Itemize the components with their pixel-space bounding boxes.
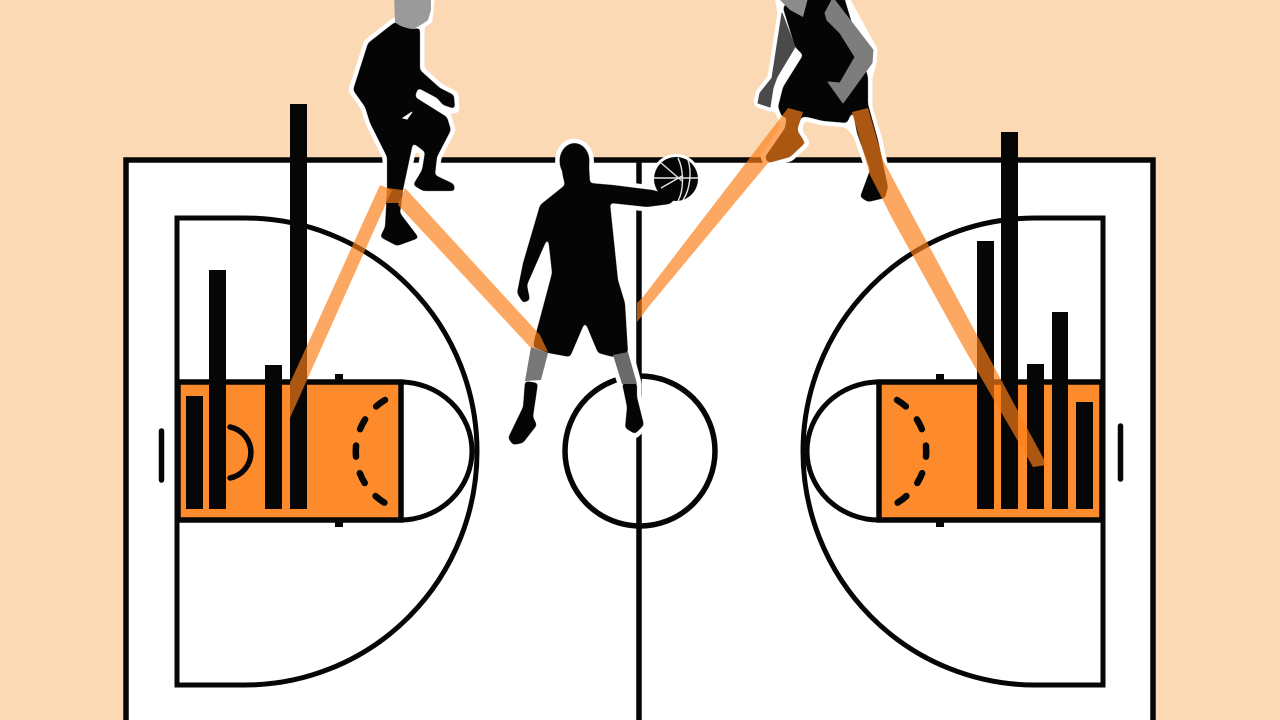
court <box>126 160 1153 720</box>
panel: right half court <box>803 132 1120 685</box>
left defender outline <box>353 0 455 246</box>
left defender slit <box>403 112 412 119</box>
pass line: defender to player <box>398 188 548 352</box>
left lane ticks <box>335 374 343 527</box>
right backboard <box>1118 426 1123 479</box>
right defender far arm <box>758 13 795 107</box>
panel: left half court <box>162 104 477 685</box>
right defender torso and legs <box>765 0 888 202</box>
player body <box>508 143 677 445</box>
right dashed arc <box>897 400 926 503</box>
player right knee <box>613 352 637 384</box>
pass line: player to right defender <box>637 108 805 322</box>
left orange paint <box>178 382 401 520</box>
right defender head <box>778 0 808 17</box>
player left knee <box>525 347 548 381</box>
left backboard <box>159 431 164 480</box>
right defender outline <box>758 0 888 202</box>
left dashed arc <box>356 400 385 503</box>
left restricted arc <box>230 427 251 478</box>
left defender head <box>394 0 431 29</box>
pass lines <box>290 108 1047 467</box>
left free-throw semicircle <box>400 382 472 520</box>
right orange paint <box>879 382 1102 520</box>
figure: right defender <box>758 0 888 202</box>
right lane ticks <box>936 374 944 527</box>
left bar chart <box>186 104 307 509</box>
basketball <box>654 157 698 201</box>
right three-point arc <box>803 218 1103 685</box>
figure: center player with ball <box>508 143 701 445</box>
left defender body <box>353 22 455 246</box>
figure: left defender <box>353 0 455 246</box>
player outline <box>508 143 677 445</box>
pass line: bar to defender <box>290 185 392 418</box>
right defender near arm <box>825 0 873 103</box>
pass line: right defender to bars <box>852 108 1047 467</box>
ball outline <box>651 154 701 204</box>
left three-point arc <box>177 218 477 685</box>
right free-throw semicircle <box>807 382 879 520</box>
shin highlight <box>387 188 403 203</box>
right bar chart <box>977 132 1093 509</box>
